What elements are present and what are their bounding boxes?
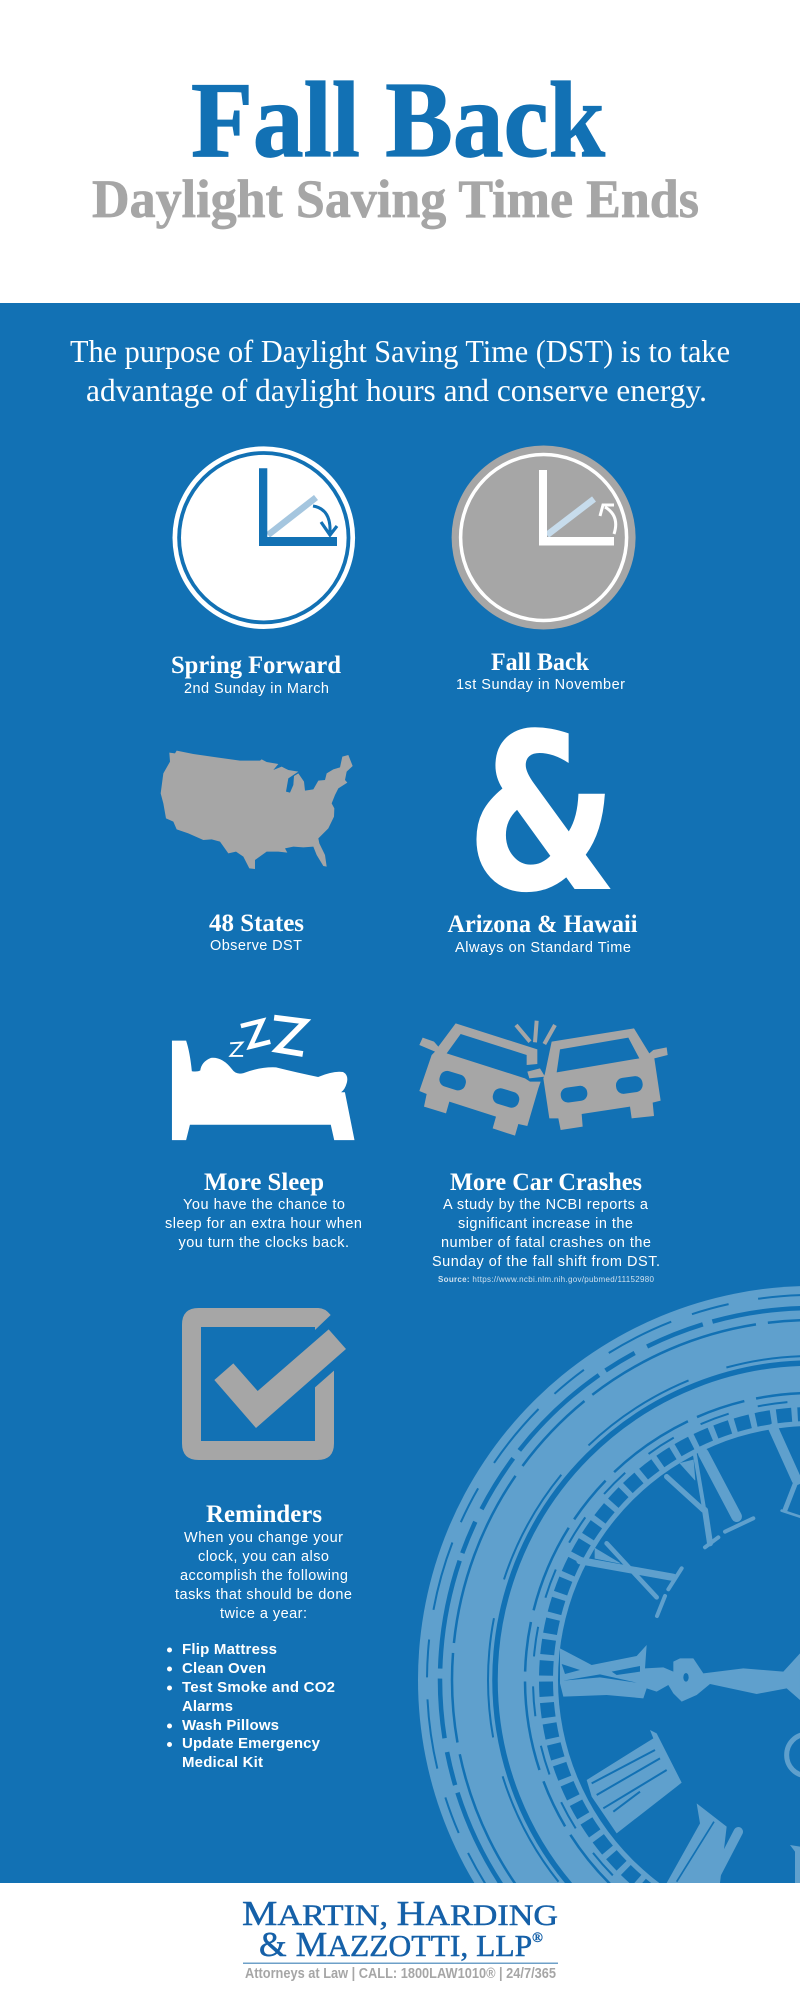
right car — [543, 1028, 668, 1130]
main blue panel — [0, 303, 800, 1883]
label: spring forward: Spring Forward — [171, 652, 341, 679]
label: fall back: 1st Sunday in November — [456, 677, 625, 693]
source note: Source: https://www.ncbi.nlm.nih.gov/pubmed/11152980 — [438, 1275, 655, 1284]
subtitle: Daylight Saving Time Ends — [92, 169, 699, 229]
label: spring forward: 2nd Sunday in March — [184, 681, 329, 697]
label: arizona and hawaii: Always on Standard Time — [455, 940, 631, 956]
icon: fall back clock — [452, 446, 636, 630]
checklist — [167, 1641, 335, 1771]
icon: spring forward clock — [172, 446, 355, 629]
checklist: Clean Oven — [182, 1660, 266, 1677]
text block: more sleep — [165, 1169, 362, 1251]
intro text — [70, 333, 730, 408]
text block: more sleep: You have the chance to — [183, 1197, 345, 1213]
label: spring forward — [171, 652, 341, 697]
firm name line two: & MAZZOTTI, LLP — [259, 1925, 529, 1964]
checklist: Alarms — [182, 1698, 233, 1715]
checklist: Update Emergency — [182, 1735, 321, 1752]
intro text: advantage of daylight hours and conserve energy. — [86, 372, 707, 408]
title: Fall Back — [191, 61, 605, 180]
intro text: The purpose of Daylight Saving Time (DST) is to take — [70, 333, 730, 369]
icon: bed with sleeper — [172, 1018, 354, 1140]
text block: reminders: clock, you can also — [198, 1549, 329, 1565]
numeral VI fragment — [790, 1845, 800, 1883]
text block: more car crashes — [432, 1169, 660, 1284]
text block: reminders: Reminders — [206, 1501, 322, 1528]
footer logo — [0, 1883, 800, 2000]
text block: reminders: twice a year: — [220, 1606, 307, 1622]
label: arizona and hawaii — [448, 911, 638, 956]
centre ring — [787, 1734, 800, 1776]
tagline: Attorneys at Law | CALL: 1800LAW1010® | 24/7/365 — [245, 1966, 556, 1982]
impact sparks — [516, 1021, 555, 1044]
firm name line two: ® — [532, 1931, 543, 1946]
firm name line one: MARTIN, HARDING — [242, 1894, 558, 1933]
label: 48 states: 48 States — [209, 910, 304, 937]
text block: reminders — [175, 1501, 352, 1622]
icon: US map — [161, 751, 353, 869]
checklist: Wash Pillows — [182, 1717, 279, 1734]
text block: more sleep: you turn the clocks back. — [178, 1235, 349, 1251]
text block: more car crashes: number of fatal crashes on the — [441, 1235, 651, 1251]
icon: checkmark box — [182, 1308, 346, 1460]
checklist: Test Smoke and CO2 — [182, 1679, 335, 1696]
text block: reminders: tasks that should be done — [175, 1587, 352, 1603]
header panel — [0, 0, 800, 303]
text block: more car crashes: A study by the NCBI reports a — [443, 1197, 649, 1213]
text block: more car crashes: More Car Crashes — [450, 1169, 642, 1196]
text block: more car crashes: Sunday of the fall shift from DST. — [432, 1254, 660, 1270]
icon: car crash — [419, 1021, 668, 1136]
clock numerals upper — [580, 1428, 800, 1616]
text block: reminders: accomplish the following — [180, 1568, 348, 1584]
text block: reminders: When you change your — [184, 1530, 343, 1546]
text block: more sleep: More Sleep — [204, 1169, 324, 1196]
clock numerals lower and hand — [560, 1645, 800, 1883]
numeral VII — [667, 1803, 727, 1883]
label: 48 states — [209, 910, 304, 954]
decorative clock illustration — [418, 1286, 800, 1883]
numeral VIII — [587, 1730, 682, 1833]
left car — [419, 1023, 545, 1136]
label: arizona and hawaii: Arizona & Hawaii — [448, 911, 638, 938]
checklist: Medical Kit — [182, 1754, 263, 1771]
label: fall back: Fall Back — [491, 649, 589, 676]
label: fall back — [456, 649, 625, 693]
numeral IX and clock hand — [560, 1645, 800, 1702]
checklist: Flip Mattress — [182, 1641, 277, 1658]
text block: more car crashes: significant increase in the — [458, 1216, 633, 1232]
icon: ampersand: & — [466, 688, 618, 941]
text block: more sleep: sleep for an extra hour when — [165, 1216, 362, 1232]
label: 48 states: Observe DST — [210, 938, 302, 954]
